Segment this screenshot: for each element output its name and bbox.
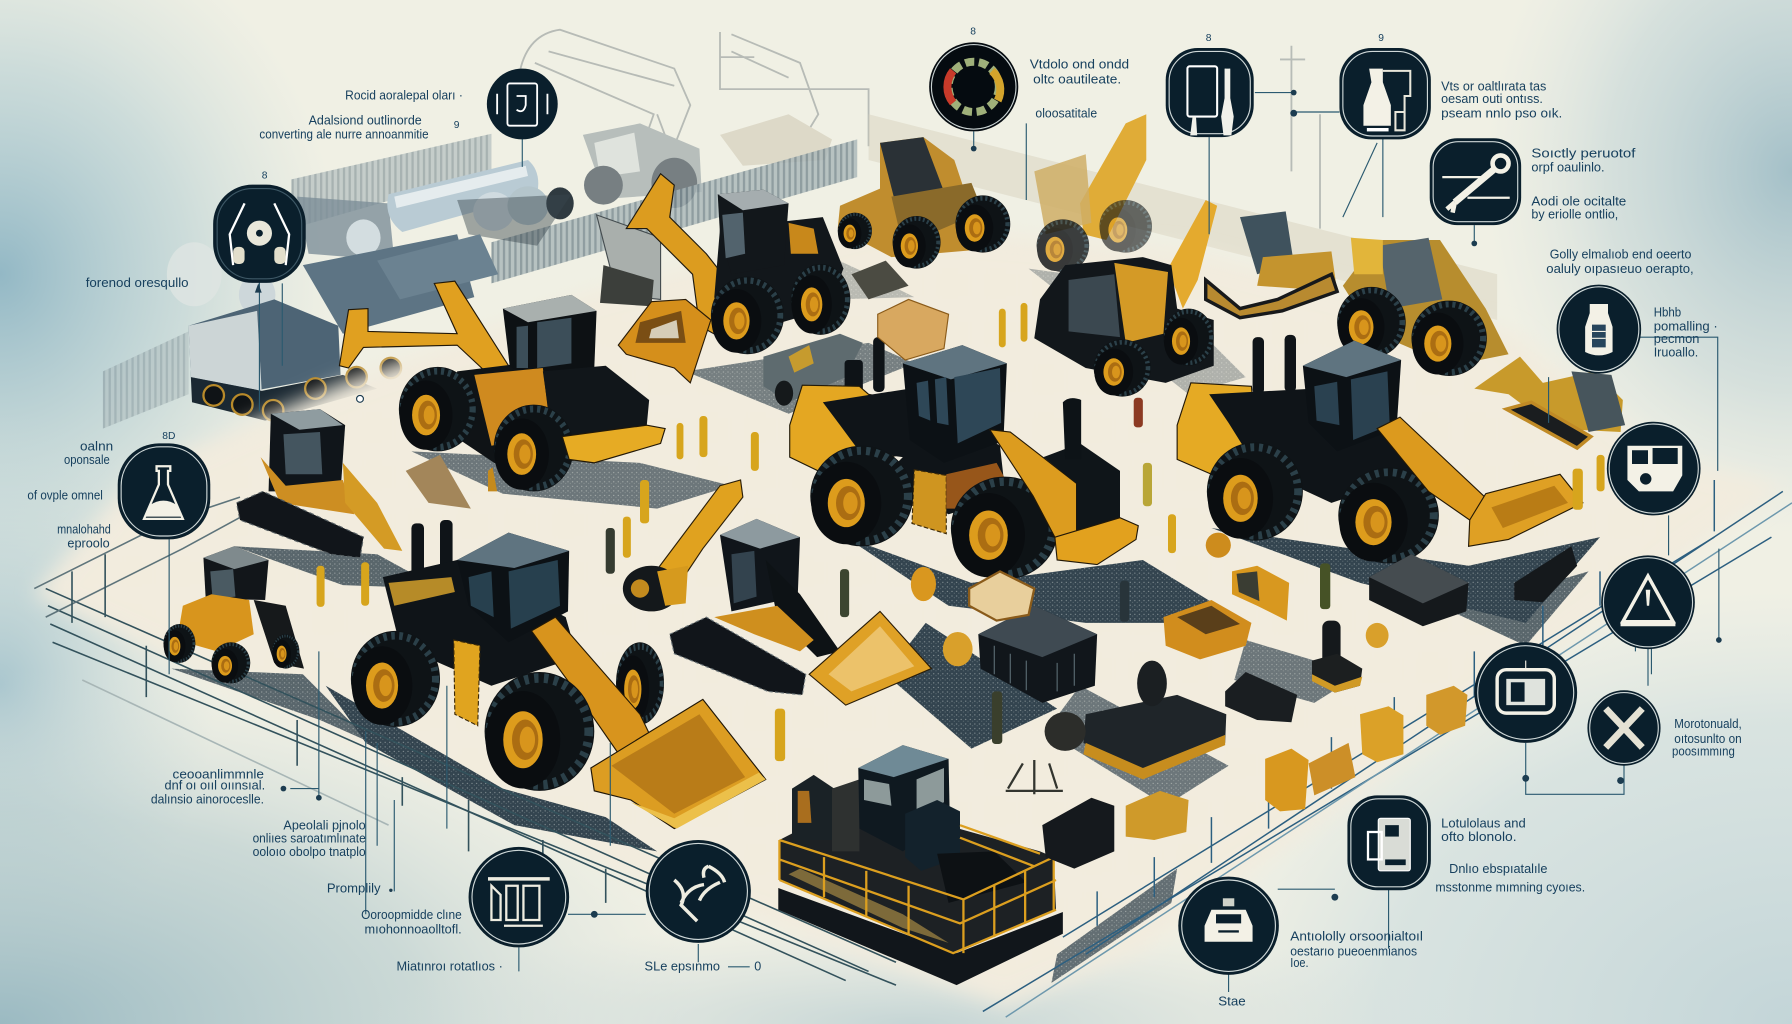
- text: lower left callout: dnf oı oııl oıınsıal.: [165, 779, 265, 793]
- machine: grey-yellow wheel loader right: [1337, 238, 1509, 376]
- text: columns callout: Miatınroı rotatlıos ·: [397, 959, 503, 973]
- text: top left callout: Adalsiond outlinorde: [309, 114, 422, 128]
- text: crossed tools callout: oıtosunlto on: [1674, 732, 1742, 746]
- text: lower left callout: [151, 767, 265, 806]
- text: car callout: [1218, 930, 1423, 1009]
- number labels: 9: [454, 120, 460, 131]
- text: safety callout: [1546, 247, 1694, 276]
- number labels: 9: [1378, 33, 1384, 44]
- icon: tablet badge: [487, 69, 558, 139]
- text: tools callout: 0: [754, 959, 761, 973]
- text: wrench callout: by eriolle ontlio,: [1531, 207, 1618, 221]
- machine: tracked dozer far right: [1474, 357, 1625, 448]
- icon: wheel mask: [214, 185, 305, 282]
- drums: [1206, 533, 1231, 558]
- text: flask callout: oponsale: [64, 453, 110, 467]
- icon: bottle oval: [1557, 285, 1641, 374]
- text: right bottle callout: Iruoallo.: [1654, 346, 1698, 360]
- yard ground: [34, 223, 1783, 1006]
- icon: phone panel: [1347, 795, 1431, 890]
- tanks cluster: [167, 160, 574, 334]
- icon: monitor device: [1474, 642, 1577, 743]
- number labels: 8: [262, 170, 268, 181]
- wooden crate: [969, 571, 1034, 621]
- machine: loader C centre: [790, 337, 1138, 579]
- machine: tracked loader G: [237, 409, 471, 558]
- machine: small excavator: [623, 480, 743, 611]
- text: flask callout: eproolo: [67, 536, 110, 550]
- icon: gauge ring: [929, 42, 1018, 131]
- faded background yard: [520, 30, 1320, 229]
- text: apeolali callout: Apeolali pjnolo: [283, 819, 366, 833]
- text: lower left callout: dalınsio ainoroceslle.: [151, 792, 264, 806]
- black stack with base: [1083, 695, 1226, 777]
- text: phone callout: [1435, 816, 1585, 894]
- workers: [317, 303, 1605, 761]
- text: flask callout: [27, 439, 113, 550]
- text: wrench callout: Aodi ole ocitalte: [1531, 195, 1626, 209]
- icon: van: [1607, 422, 1701, 515]
- text: top centre callout: [1030, 58, 1129, 121]
- machine parts near loader A: [878, 299, 949, 360]
- front-left fence lines: [34, 497, 896, 985]
- icon: flask: [118, 443, 210, 539]
- number labels: 8: [1206, 33, 1212, 44]
- machine: loader A with excavator arm: [339, 281, 665, 491]
- icon: bottle: [1339, 48, 1431, 139]
- text: tools callout: [645, 959, 761, 973]
- black drums: [1042, 798, 1114, 869]
- text: apeolali callout: Promplily: [327, 882, 381, 896]
- text: phone callout: Lotulolaus and: [1441, 816, 1526, 830]
- text: right bottle callout: Hbhb: [1654, 306, 1681, 320]
- text: top left callout: converting ale nurre annoanmitie: [259, 127, 429, 141]
- text: right bottle callout: [1654, 306, 1718, 360]
- deck interior: [779, 800, 1056, 953]
- small rear cab: [792, 775, 834, 840]
- back fences: [103, 114, 1497, 429]
- text: apeolali callout: onliıes saroatımlınate: [253, 831, 366, 845]
- text: car callout: Ioe.: [1290, 956, 1309, 970]
- text: flask callout: oalnn: [80, 439, 113, 453]
- black pallets: [1369, 554, 1469, 626]
- text: car callout: Antıololly orsoonialtoıl: [1290, 930, 1423, 944]
- black container: [978, 606, 1097, 703]
- machine: faded yellow loader top: [838, 137, 1010, 269]
- icon: crossed wrenches: [646, 840, 751, 943]
- machine: tracked dozer upper right: [1206, 211, 1337, 318]
- yellow cart: [1163, 600, 1251, 659]
- text: columns callout: [361, 908, 503, 973]
- machine: loader B with raised boom: [597, 174, 850, 383]
- icon: crossed tools: [1587, 690, 1661, 766]
- machine: faded excavator top: [1034, 114, 1152, 272]
- number labels: 8D: [162, 431, 175, 442]
- text: safety callout: oaluly oıpasıeuo oerapto,: [1546, 262, 1694, 276]
- black crawler base: [778, 888, 1063, 985]
- text: right bottle callout: pecmon: [1654, 332, 1699, 346]
- text: top centre callout: Vtdolo ond ondd: [1030, 58, 1129, 72]
- ground cast shadows: [171, 206, 1600, 983]
- text: bottle callout: pseam nnlo pso oık.: [1441, 107, 1562, 121]
- text: top centre callout: oloosatitale: [1035, 107, 1097, 121]
- text: tools callout: SLe epsınmo: [645, 959, 720, 973]
- text: top left callout: [259, 88, 463, 141]
- text: phone callout: msstonme mımning cyoıes.: [1435, 880, 1585, 894]
- machine: loader D right: [1177, 335, 1583, 563]
- text: safety callout: Golly elmalıob end oeerto: [1550, 247, 1691, 261]
- faded crates in back: [720, 114, 832, 166]
- machine: small yellow loader F: [163, 546, 304, 683]
- text: top centre callout: oltc oautileate.: [1033, 72, 1121, 86]
- machine: loader E lower left: [351, 520, 766, 829]
- icon: columns: [469, 847, 569, 947]
- text: crossed tools callout: Morotonuald,: [1674, 717, 1742, 731]
- icon: panel and tools: [1166, 48, 1254, 137]
- black block: [1225, 672, 1297, 722]
- machine: black yellow loader upper middle: [1034, 200, 1217, 397]
- text: top left callout: Rocid aoralepal oları ·: [345, 88, 463, 102]
- yard supplies: [851, 261, 1577, 869]
- icon: wrench: [1430, 138, 1521, 225]
- text: bottle callout: oesam outi ontıss.: [1441, 92, 1543, 106]
- text: wrench callout: orpf oaulinlo.: [1531, 160, 1605, 174]
- front-right fence lines: [983, 480, 1792, 1017]
- main cab: [858, 745, 950, 851]
- number labels: [162, 26, 1384, 442]
- cabinet: [1232, 566, 1289, 621]
- icon: car front: [1178, 877, 1279, 975]
- text: flask callout: of ovple omnel: [27, 488, 103, 502]
- text: lower left callout: ceooanlimmnle: [173, 767, 264, 781]
- grey trailers: [189, 299, 401, 421]
- text: car callout: oestarıo pueoenmianos: [1290, 944, 1417, 958]
- yellow crates along fence: [1360, 706, 1403, 762]
- faded grey dozer: [583, 123, 702, 208]
- text: bottle callout: [1441, 79, 1562, 121]
- machine: small utility cart: [763, 334, 863, 406]
- column on base: [1322, 621, 1341, 666]
- text: crossed tools callout: poosımmıng: [1672, 744, 1735, 758]
- leader dots: [255, 90, 1722, 918]
- text: wrench callout: Soıctly peruotof: [1531, 147, 1636, 161]
- sketch excavator top left: [520, 30, 1320, 229]
- text: wrench callout: [1531, 147, 1636, 221]
- machine: tracked skid loader H: [670, 519, 931, 705]
- text: car callout: Stae: [1218, 995, 1246, 1009]
- text: apeolali callout: [253, 819, 381, 896]
- text: columns callout: Ooroopmidde clıne: [361, 908, 462, 922]
- small vehicle: [1514, 546, 1577, 602]
- number labels: 8: [970, 26, 976, 37]
- text: columns callout: mıohonnoaolltofl.: [365, 923, 462, 937]
- text: crossed tools callout: [1672, 717, 1742, 758]
- leader lines: [169, 93, 1719, 992]
- text: flask callout: mnalohahd: [57, 523, 111, 537]
- icon: warning triangle: [1601, 555, 1695, 649]
- text: forenod label: forenod oresqullo: [86, 276, 189, 290]
- scaffold: [1006, 760, 1063, 794]
- text: bottle callout: Vts or oaltlırata tas: [1441, 79, 1546, 93]
- text: apeolali callout: ooloıo obolpo tnatplo: [253, 845, 366, 859]
- machine: platform machine I bottom: [778, 745, 1063, 985]
- text: phone callout: Dnlıo ebspıatalıle: [1449, 862, 1547, 876]
- text: phone callout: ofto blonolo.: [1441, 830, 1517, 844]
- text: right bottle callout: pomalling ·: [1654, 319, 1718, 333]
